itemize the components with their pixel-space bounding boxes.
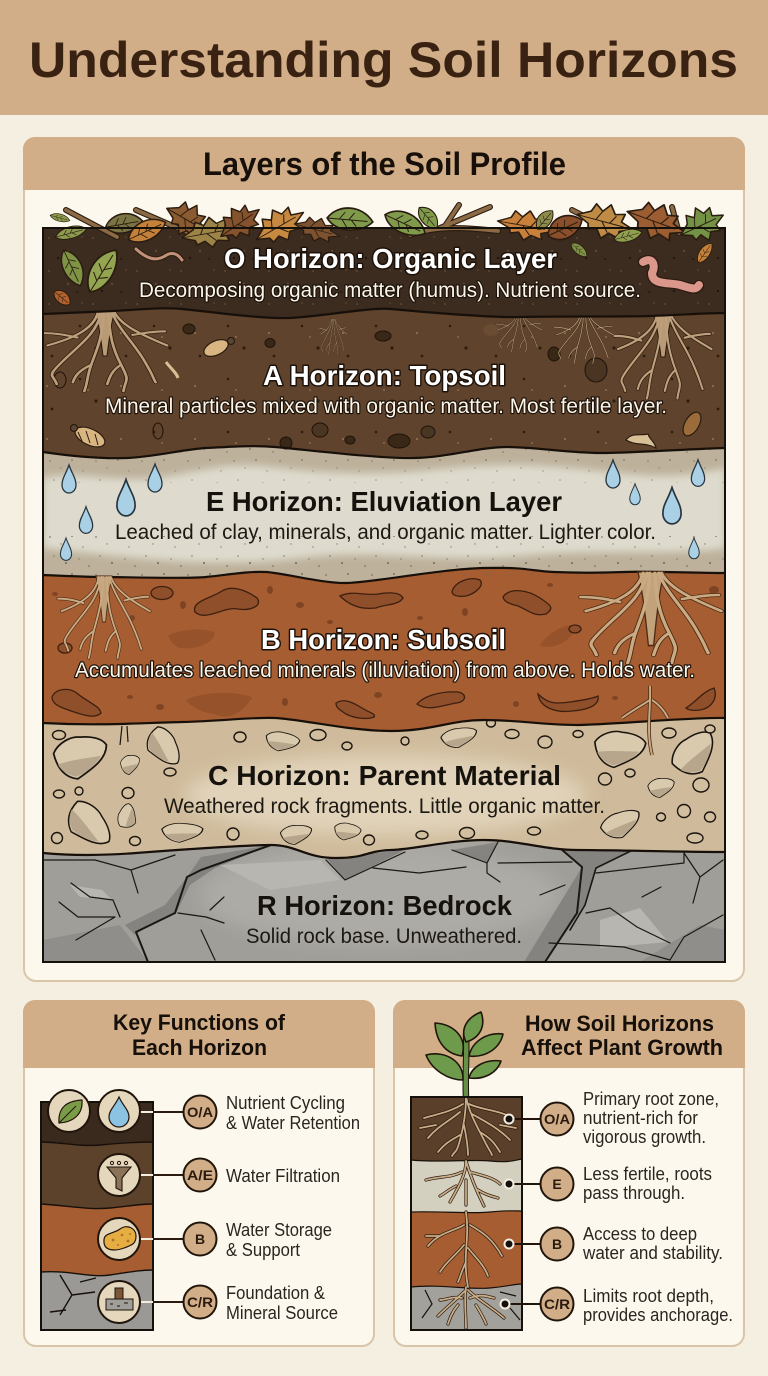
- panel heading: Key Functions of: [113, 1010, 286, 1035]
- growth row: C/R: provides anchorage.: [583, 1305, 733, 1325]
- leaf litter on the surface: [49, 193, 730, 254]
- icon: sponge: [98, 1218, 140, 1260]
- roots in subsoil: [58, 572, 721, 755]
- growth row: C/R: [540, 1286, 733, 1325]
- E horizon text: E Horizon: Eluviation Layer: [206, 486, 562, 517]
- connector lines: [140, 1112, 184, 1302]
- insects: [70, 336, 705, 451]
- panel heading: [521, 1011, 723, 1060]
- soil profile diagram: [43, 193, 730, 962]
- panel heading: Affect Plant Growth: [521, 1035, 723, 1060]
- panel heading: Layers of the Soil Profile: [203, 146, 566, 182]
- function row: A/E: [184, 1158, 340, 1192]
- growth row: O/A: O/A: [544, 1111, 570, 1127]
- function row: C/R: C/R: [187, 1294, 213, 1310]
- growth row: O/A: nutrient-rich for: [583, 1108, 698, 1128]
- R horizon text: R Horizon: Bedrock: [257, 890, 512, 921]
- pebbles: [54, 324, 607, 449]
- plant seedling: [426, 1012, 503, 1098]
- growth row: B: B: [552, 1236, 562, 1252]
- function row: O/A: Nutrient Cycling: [226, 1093, 345, 1113]
- C horizon text: Weathered rock fragments. Little organic matter.: [164, 795, 605, 818]
- panel heading: How Soil Horizons: [525, 1011, 714, 1036]
- C horizon text: C Horizon: Parent Material: [208, 760, 561, 791]
- function row: A/E: Water Filtration: [226, 1166, 340, 1186]
- B horizon text: B Horizon: Subsoil: [261, 624, 506, 655]
- soft stains: [168, 625, 578, 717]
- growth row: B: water and stability.: [582, 1243, 723, 1263]
- icon: foundation: [98, 1281, 140, 1323]
- title banner: [0, 0, 768, 115]
- C horizon text: [164, 760, 605, 818]
- function row: O/A: O/A: [187, 1104, 213, 1120]
- A horizon: topsoil band: [44, 309, 724, 458]
- roots from organic layer: [43, 310, 712, 398]
- mini soil column: [41, 1102, 153, 1330]
- R horizon: bedrock band: [44, 841, 724, 961]
- A horizon text: Mineral particles mixed with organic matter. Most fertile layer.: [105, 395, 667, 418]
- horizon boundary lines: [43, 308, 725, 858]
- growth row: E: Less fertile, roots: [583, 1164, 712, 1184]
- plant soil column with roots: [411, 1097, 522, 1330]
- O horizon: organic layer band: [43, 228, 725, 318]
- panel heading: [113, 1010, 286, 1060]
- function row: B: Water Storage: [226, 1220, 332, 1240]
- icon: filter funnel: [98, 1154, 140, 1196]
- function row: C/R: Foundation &: [226, 1283, 325, 1303]
- growth row: E: pass through.: [583, 1183, 685, 1203]
- growth row: C/R: Limits root depth,: [583, 1286, 714, 1306]
- function row: B: B: [195, 1231, 205, 1247]
- growth row: O/A: vigorous growth.: [583, 1127, 706, 1147]
- growth row: B: Access to deep: [583, 1224, 697, 1244]
- growth row: O/A: Primary root zone,: [583, 1089, 719, 1109]
- function row: C/R: Mineral Source: [226, 1303, 338, 1323]
- small clay specks: [52, 583, 719, 710]
- growth row: B: [540, 1224, 723, 1263]
- icon: water drop: [98, 1090, 140, 1132]
- title: Understanding Soil Horizons: [29, 32, 738, 88]
- B horizon text: Accumulates leached minerals (illuviation) from above. Holds water.: [75, 659, 695, 682]
- A horizon text: [105, 360, 667, 418]
- B horizon: subsoil band: [44, 569, 724, 730]
- function row: A/E: A/E: [187, 1167, 213, 1183]
- growth row: O/A: [540, 1089, 719, 1147]
- growth row: E: E: [552, 1176, 562, 1192]
- E horizon text: Leached of clay, minerals, and organic matter. Lighter color.: [115, 521, 656, 544]
- function row: O/A: & Water Retention: [226, 1113, 360, 1133]
- panel: key functions: [23, 1000, 375, 1346]
- function row: B: [184, 1220, 332, 1260]
- soil box frame: [43, 228, 725, 962]
- O horizon text: [139, 243, 641, 302]
- C horizon: parent material band: [44, 719, 724, 857]
- connector lines with dots: [500, 1114, 541, 1308]
- water drops: [60, 460, 705, 560]
- R horizon text: Solid rock base. Unweathered.: [246, 925, 522, 948]
- function row: B: & Support: [226, 1240, 300, 1260]
- O horizon text: O Horizon: Organic Layer: [224, 243, 557, 274]
- growth row: C/R: C/R: [544, 1296, 570, 1312]
- growth row: E: [540, 1164, 712, 1203]
- E horizon: eluviation band: [44, 447, 724, 582]
- B horizon text: [75, 624, 695, 682]
- A horizon text: A Horizon: Topsoil: [263, 360, 506, 391]
- function row: C/R: [184, 1283, 338, 1323]
- E horizon text: [115, 486, 656, 544]
- clay blobs: [52, 579, 715, 718]
- function row: O/A: [184, 1093, 360, 1133]
- R horizon text: [246, 890, 522, 948]
- panel heading: Each Horizon: [132, 1035, 267, 1060]
- O horizon text: Decomposing organic matter (humus). Nutrient source.: [139, 279, 641, 302]
- leaves and worms in organic layer: [51, 240, 716, 309]
- icon: leaf: [48, 1090, 90, 1132]
- rock fragments: [52, 719, 725, 855]
- panel: plant growth: [393, 1000, 745, 1346]
